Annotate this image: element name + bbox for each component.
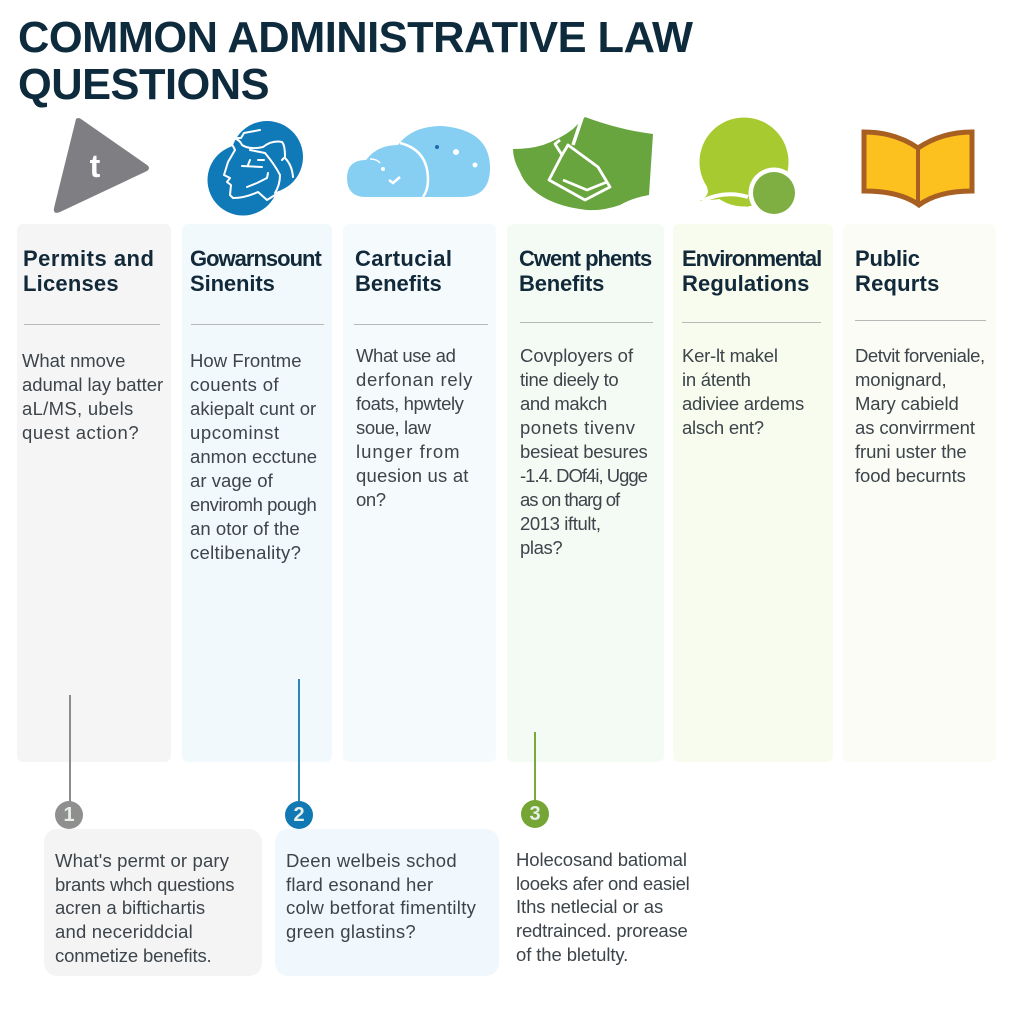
text: col 1: adumal lay batter bbox=[22, 374, 163, 395]
heading: col 6: Requrts bbox=[855, 270, 940, 296]
text: col 6: Mary cabield bbox=[855, 393, 959, 414]
callout text 2: Deen welbeis schod bbox=[286, 850, 457, 871]
callout text 3: Holecosand batiomal bbox=[516, 849, 687, 870]
text: col 4: besieat besures bbox=[520, 441, 648, 462]
callout text 1: What's permt or pary bbox=[55, 850, 229, 871]
text: col 5: in átenth bbox=[682, 369, 751, 390]
heading: col 1: Licenses bbox=[23, 270, 119, 296]
text: col 2: upcominst bbox=[190, 422, 280, 443]
text: col 3: derfonan rely bbox=[356, 369, 473, 390]
text: col 6: food becurnts bbox=[855, 465, 966, 486]
badge 3 bbox=[521, 800, 549, 828]
badge 2 bbox=[285, 801, 313, 829]
text: col 6: monignard, bbox=[855, 369, 947, 390]
badge 2: 2 bbox=[293, 804, 305, 826]
heading: col 1 bbox=[23, 246, 154, 296]
text: col 4: and makch bbox=[520, 393, 607, 414]
heading: col 4: Benefits bbox=[519, 270, 604, 296]
text: col 5: alsch ent? bbox=[682, 417, 764, 438]
text: col 6: as convirrment bbox=[855, 417, 975, 438]
icon: green leaf flag bbox=[513, 117, 653, 210]
text: col 3 bbox=[356, 345, 473, 510]
callout text 3 bbox=[516, 849, 689, 965]
text: col 2: How Frontme bbox=[190, 350, 302, 371]
title: COMMON ADMINISTRATIVE LAW bbox=[18, 14, 692, 62]
icon: open book bbox=[862, 130, 974, 208]
title bbox=[18, 14, 693, 109]
text: col 6: fruni uster the bbox=[855, 441, 967, 462]
heading: col 5 bbox=[682, 246, 821, 296]
heading: col 4 bbox=[519, 246, 652, 296]
text: col 3: quesion us at bbox=[356, 465, 469, 486]
panel: environmental regulations bbox=[673, 224, 833, 762]
heading: col 1: Permits and bbox=[23, 246, 154, 271]
heading: col 5: Regulations bbox=[682, 270, 810, 296]
callout text 1: acren a biftichartis bbox=[55, 897, 205, 918]
text: col 6 bbox=[855, 345, 985, 486]
heading: col 5: Environmental bbox=[682, 246, 821, 271]
heading: col 6 bbox=[855, 246, 940, 296]
connector 2 bbox=[298, 679, 300, 804]
heading: col 3 bbox=[355, 246, 452, 296]
text: col 3: foats, hpwtely bbox=[356, 393, 464, 414]
text: col 2: enviromh pough bbox=[190, 494, 316, 515]
panel: cartucial benefits bbox=[343, 224, 496, 762]
heading: col 6: Public bbox=[855, 246, 920, 271]
text: col 4: Covployers of bbox=[520, 345, 633, 366]
text: col 5: adiviee ardems bbox=[682, 393, 804, 414]
text: col 4: -1.4. DOf4i, Ugge bbox=[520, 465, 647, 486]
text: col 4: tine dieely to bbox=[520, 369, 618, 390]
text: col 5 bbox=[682, 345, 804, 438]
heading: col 2: Gowarnsount bbox=[190, 246, 321, 271]
text: col 2: anmon ecctune bbox=[190, 446, 317, 467]
callout text 3: of the bletulty. bbox=[516, 944, 628, 965]
heading: col 3: Benefits bbox=[355, 270, 442, 296]
text: col 1: quest action? bbox=[22, 422, 139, 443]
icon: speech bubble bbox=[700, 118, 795, 214]
text: col 2: couents of bbox=[190, 374, 279, 395]
callout text 2: flard esonand her bbox=[286, 874, 433, 895]
text: col 5: Ker-lt makel bbox=[682, 345, 778, 366]
text: col 4 bbox=[520, 345, 648, 558]
icon: light blue cloud bbox=[347, 126, 490, 197]
callout box 2 bbox=[275, 829, 499, 976]
connector 1 bbox=[69, 695, 70, 805]
icon: grey triangle bbox=[54, 118, 149, 213]
panel: current benefits bbox=[507, 224, 664, 762]
title: QUESTIONS bbox=[18, 61, 269, 109]
badge 1 bbox=[55, 801, 83, 829]
text: col 3: soue, law bbox=[356, 417, 431, 438]
text: col 3: on? bbox=[356, 489, 386, 510]
panel: public bbox=[843, 224, 996, 762]
text: col 3: lunger from bbox=[356, 441, 461, 462]
callout box 1 bbox=[44, 829, 262, 976]
callout text 1 bbox=[55, 850, 234, 966]
text: col 4: 2013 iftult, bbox=[520, 513, 601, 534]
icon: grey triangle: t bbox=[90, 148, 101, 184]
callout text 3: Iths netlecial or as bbox=[516, 896, 663, 917]
heading: col 4: Cwent phents bbox=[519, 246, 651, 271]
text: col 1: What nmove bbox=[22, 350, 125, 371]
text: col 4: plas? bbox=[520, 537, 562, 558]
callout text 2 bbox=[286, 850, 476, 942]
callout text 1: brants whch questions bbox=[55, 874, 234, 895]
text: col 1 bbox=[22, 350, 163, 443]
text: col 2: akiepalt cunt or bbox=[190, 398, 316, 419]
text: col 2: an otor of the bbox=[190, 518, 300, 539]
text: col 2: celtibenality? bbox=[190, 542, 301, 563]
panel: government bbox=[182, 224, 332, 762]
callout text 1: and neceriddcial bbox=[55, 921, 193, 942]
callout text 2: green glastins? bbox=[286, 921, 416, 942]
heading: col 2 bbox=[190, 246, 322, 296]
text: col 2: ar vage of bbox=[190, 470, 273, 491]
text: col 2 bbox=[190, 350, 317, 563]
callout text 1: conmetize benefits. bbox=[55, 945, 212, 966]
callout text 3: looeks afer ond easiel bbox=[516, 873, 689, 894]
heading: col 2: Sinenits bbox=[190, 270, 275, 296]
text: col 4: ponets tivenv bbox=[520, 417, 636, 438]
heading: col 3: Cartucial bbox=[355, 246, 452, 271]
text: col 6: Detvit forveniale, bbox=[855, 345, 985, 366]
callout text 3: redtrainced. prorease bbox=[516, 920, 688, 941]
badge 1: 1 bbox=[63, 804, 75, 826]
connector 3 bbox=[534, 732, 536, 802]
badge 3: 3 bbox=[529, 803, 541, 825]
text: col 4: as on tharg of bbox=[520, 489, 619, 510]
panel: permits and licenses bbox=[17, 224, 171, 762]
text: col 3: What use ad bbox=[356, 345, 455, 366]
icon: blue heads bbox=[208, 121, 303, 216]
callout text 2: colw betforat fimentilty bbox=[286, 897, 476, 918]
text: col 1: aL/MS, ubels bbox=[22, 398, 134, 419]
